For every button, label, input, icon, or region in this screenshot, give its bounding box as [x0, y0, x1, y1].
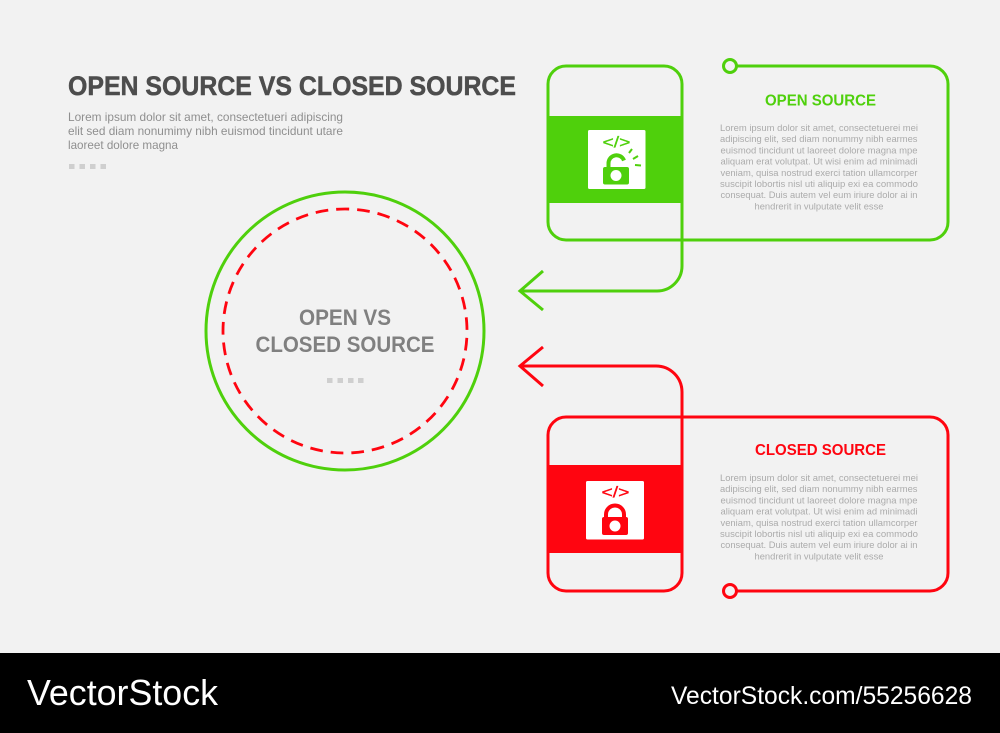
body text: closed source: euismod tincidunt ut laoreet dolore magna mpe: [720, 495, 918, 505]
footer bar: [0, 653, 1000, 733]
body text: open source: hendrerit in vulputate velit esse: [754, 201, 884, 211]
icon: closed padlock with code: [586, 481, 644, 540]
intro text block: laoreet dolore magna: [68, 138, 178, 152]
red band: [547, 465, 683, 553]
body text: closed source: [720, 473, 918, 561]
red connector outline and arrow: [520, 347, 948, 591]
body text: closed source: hendrerit in vulputate velit esse: [754, 551, 884, 561]
central circle: OPEN VS: [299, 305, 391, 330]
icon: open padlock with code: </>: [602, 134, 630, 152]
green connector outline and arrow: [520, 66, 948, 310]
panel: open source: [520, 60, 948, 310]
footer bar: VectorStock: [27, 672, 219, 713]
title: OPEN SOURCE VS CLOSED SOURCE: [68, 71, 516, 101]
body text: closed source: veniam, quisa nostrud exerci tation ullamcorper: [720, 518, 918, 528]
body text: open source: aliquam erat volutpat. Ut wisi enim ad minimadi: [720, 157, 918, 167]
body text: closed source: suscipit lobortis nisl uti aliquip exi ea commodo: [720, 529, 918, 539]
body text: open source: [720, 123, 918, 211]
green start dot: [724, 60, 736, 72]
intro text block: [68, 110, 343, 152]
footer bar: VectorStock.com/55256628: [671, 682, 972, 710]
intro dots: [69, 164, 106, 169]
intro text block: elit sed diam nonumimy nibh euismod tincidunt utare: [68, 124, 343, 138]
heading: open source: OPEN SOURCE: [765, 92, 876, 110]
body text: closed source: Lorem ipsum dolor sit amet, consectetuerei mei: [720, 473, 918, 483]
body text: closed source: aliquam erat volutpat. Ut wisi enim ad minimadi: [720, 507, 918, 517]
icon: open padlock with code: [588, 130, 646, 189]
body text: open source: adipiscing elit, sed diam nonummy nibh earmes: [720, 134, 918, 144]
body text: open source: veniam, quisa nostrud exerci tation ullamcorper: [720, 168, 918, 178]
body text: open source: consequat. Duis autem vel eum iriure dolor ai in: [720, 190, 918, 200]
central circle: CLOSED SOURCE: [256, 332, 434, 357]
red start dot: [724, 584, 736, 598]
body text: open source: suscipit lobortis nisl uti aliquip exi ea commodo: [720, 179, 918, 189]
body text: open source: Lorem ipsum dolor sit amet, consectetuerei mei: [720, 123, 918, 133]
green band: [547, 116, 683, 203]
body text: closed source: consequat. Duis autem vel eum iriure dolor ai in: [720, 540, 918, 550]
body text: closed source: adipiscing elit, sed diam nonummy nibh earmes: [720, 484, 918, 494]
panel: closed source: [520, 347, 948, 598]
heading: closed source: CLOSED SOURCE: [755, 442, 886, 459]
intro text block: Lorem ipsum dolor sit amet, consectetueri adipiscing: [68, 110, 343, 124]
central circle: [206, 192, 484, 470]
body text: open source: euismod tincidunt ut laoreet dolore magna mpe: [720, 145, 918, 155]
icon: closed padlock with code: </>: [602, 484, 630, 502]
